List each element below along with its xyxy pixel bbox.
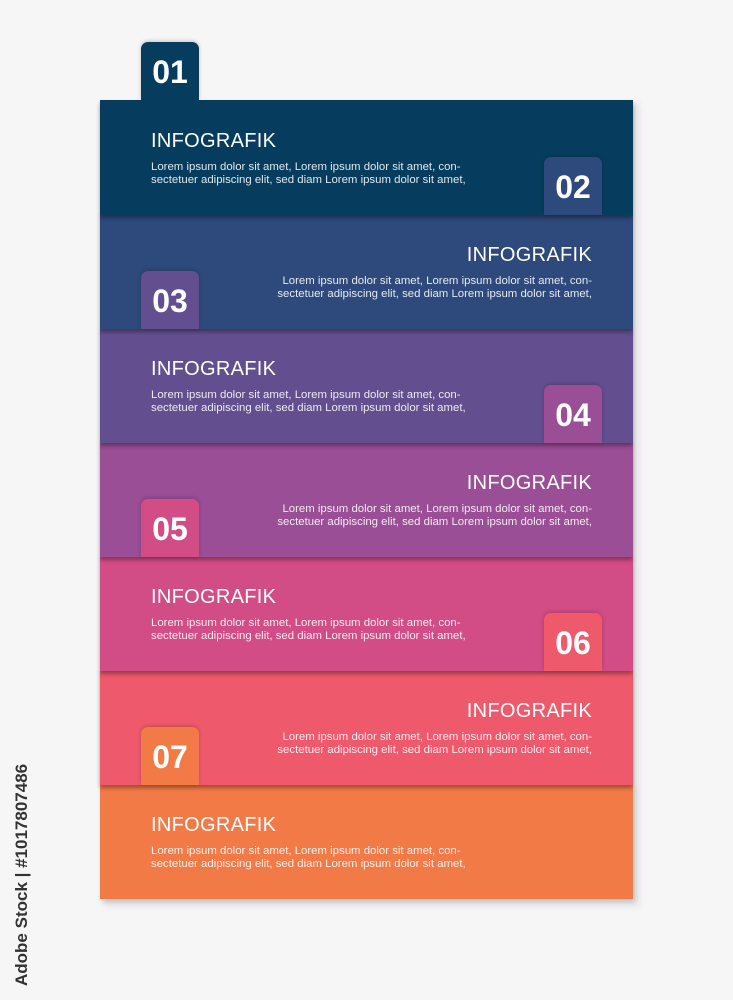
tab 04 xyxy=(544,385,602,443)
panel 2 xyxy=(100,214,633,329)
text 4: Lorem ipsum dolor sit amet, Lorem ipsum dolor sit amet, con- xyxy=(282,503,592,515)
tab 05 xyxy=(141,499,199,557)
panel 4 xyxy=(100,442,633,557)
heading 5: INFOGRAFIK xyxy=(151,586,276,608)
text 6: Lorem ipsum dolor sit amet, Lorem ipsum dolor sit amet, con- xyxy=(282,731,592,743)
tab 04: 04 xyxy=(555,397,591,433)
tab 06 xyxy=(544,613,602,671)
heading 2: INFOGRAFIK xyxy=(467,244,592,266)
panel 5 xyxy=(100,556,633,671)
page shadow xyxy=(104,104,639,906)
text 1: Lorem ipsum dolor sit amet, Lorem ipsum dolor sit amet, con- xyxy=(151,161,461,173)
heading 7: INFOGRAFIK xyxy=(151,814,276,836)
text 5: sectetuer adipiscing elit, sed diam Lorem ipsum dolor sit amet, xyxy=(151,630,466,642)
tab 03: 03 xyxy=(152,283,188,319)
panel 3 xyxy=(100,328,633,443)
text 4: sectetuer adipiscing elit, sed diam Lorem ipsum dolor sit amet, xyxy=(277,516,592,528)
text 7: sectetuer adipiscing elit, sed diam Lorem ipsum dolor sit amet, xyxy=(151,858,466,870)
tab 07 xyxy=(141,727,199,785)
text 6: sectetuer adipiscing elit, sed diam Lorem ipsum dolor sit amet, xyxy=(277,744,592,756)
text 7 xyxy=(151,845,466,870)
text 5 xyxy=(151,617,466,642)
panel 1 xyxy=(100,100,633,215)
text 2: sectetuer adipiscing elit, sed diam Lorem ipsum dolor sit amet, xyxy=(277,288,592,300)
heading 3: INFOGRAFIK xyxy=(151,358,276,380)
tab 01 xyxy=(141,42,199,100)
text 2: Lorem ipsum dolor sit amet, Lorem ipsum dolor sit amet, con- xyxy=(282,275,592,287)
tab 02: 02 xyxy=(555,169,591,205)
tab 05: 05 xyxy=(152,511,188,547)
text 1: sectetuer adipiscing elit, sed diam Lorem ipsum dolor sit amet, xyxy=(151,174,466,186)
tab 03 xyxy=(141,271,199,329)
text 3 xyxy=(151,389,466,414)
text 1 xyxy=(151,161,466,186)
tab 06: 06 xyxy=(555,625,591,661)
text 3: sectetuer adipiscing elit, sed diam Lorem ipsum dolor sit amet, xyxy=(151,402,466,414)
text 6 xyxy=(277,731,592,756)
panel 6 xyxy=(100,670,633,785)
text 4 xyxy=(277,503,592,528)
text 2 xyxy=(277,275,592,300)
panel 7 xyxy=(100,784,633,899)
heading 6: INFOGRAFIK xyxy=(467,700,592,722)
tab 01: 01 xyxy=(152,54,188,90)
heading 1: INFOGRAFIK xyxy=(151,130,276,152)
text 7: Lorem ipsum dolor sit amet, Lorem ipsum dolor sit amet, con- xyxy=(151,845,461,857)
text 3: Lorem ipsum dolor sit amet, Lorem ipsum dolor sit amet, con- xyxy=(151,389,461,401)
tab 07: 07 xyxy=(152,739,188,775)
heading 4: INFOGRAFIK xyxy=(467,472,592,494)
tab 02 xyxy=(544,157,602,215)
side watermark text: Adobe Stock | #1017807486 xyxy=(12,764,31,986)
text 5: Lorem ipsum dolor sit amet, Lorem ipsum dolor sit amet, con- xyxy=(151,617,461,629)
